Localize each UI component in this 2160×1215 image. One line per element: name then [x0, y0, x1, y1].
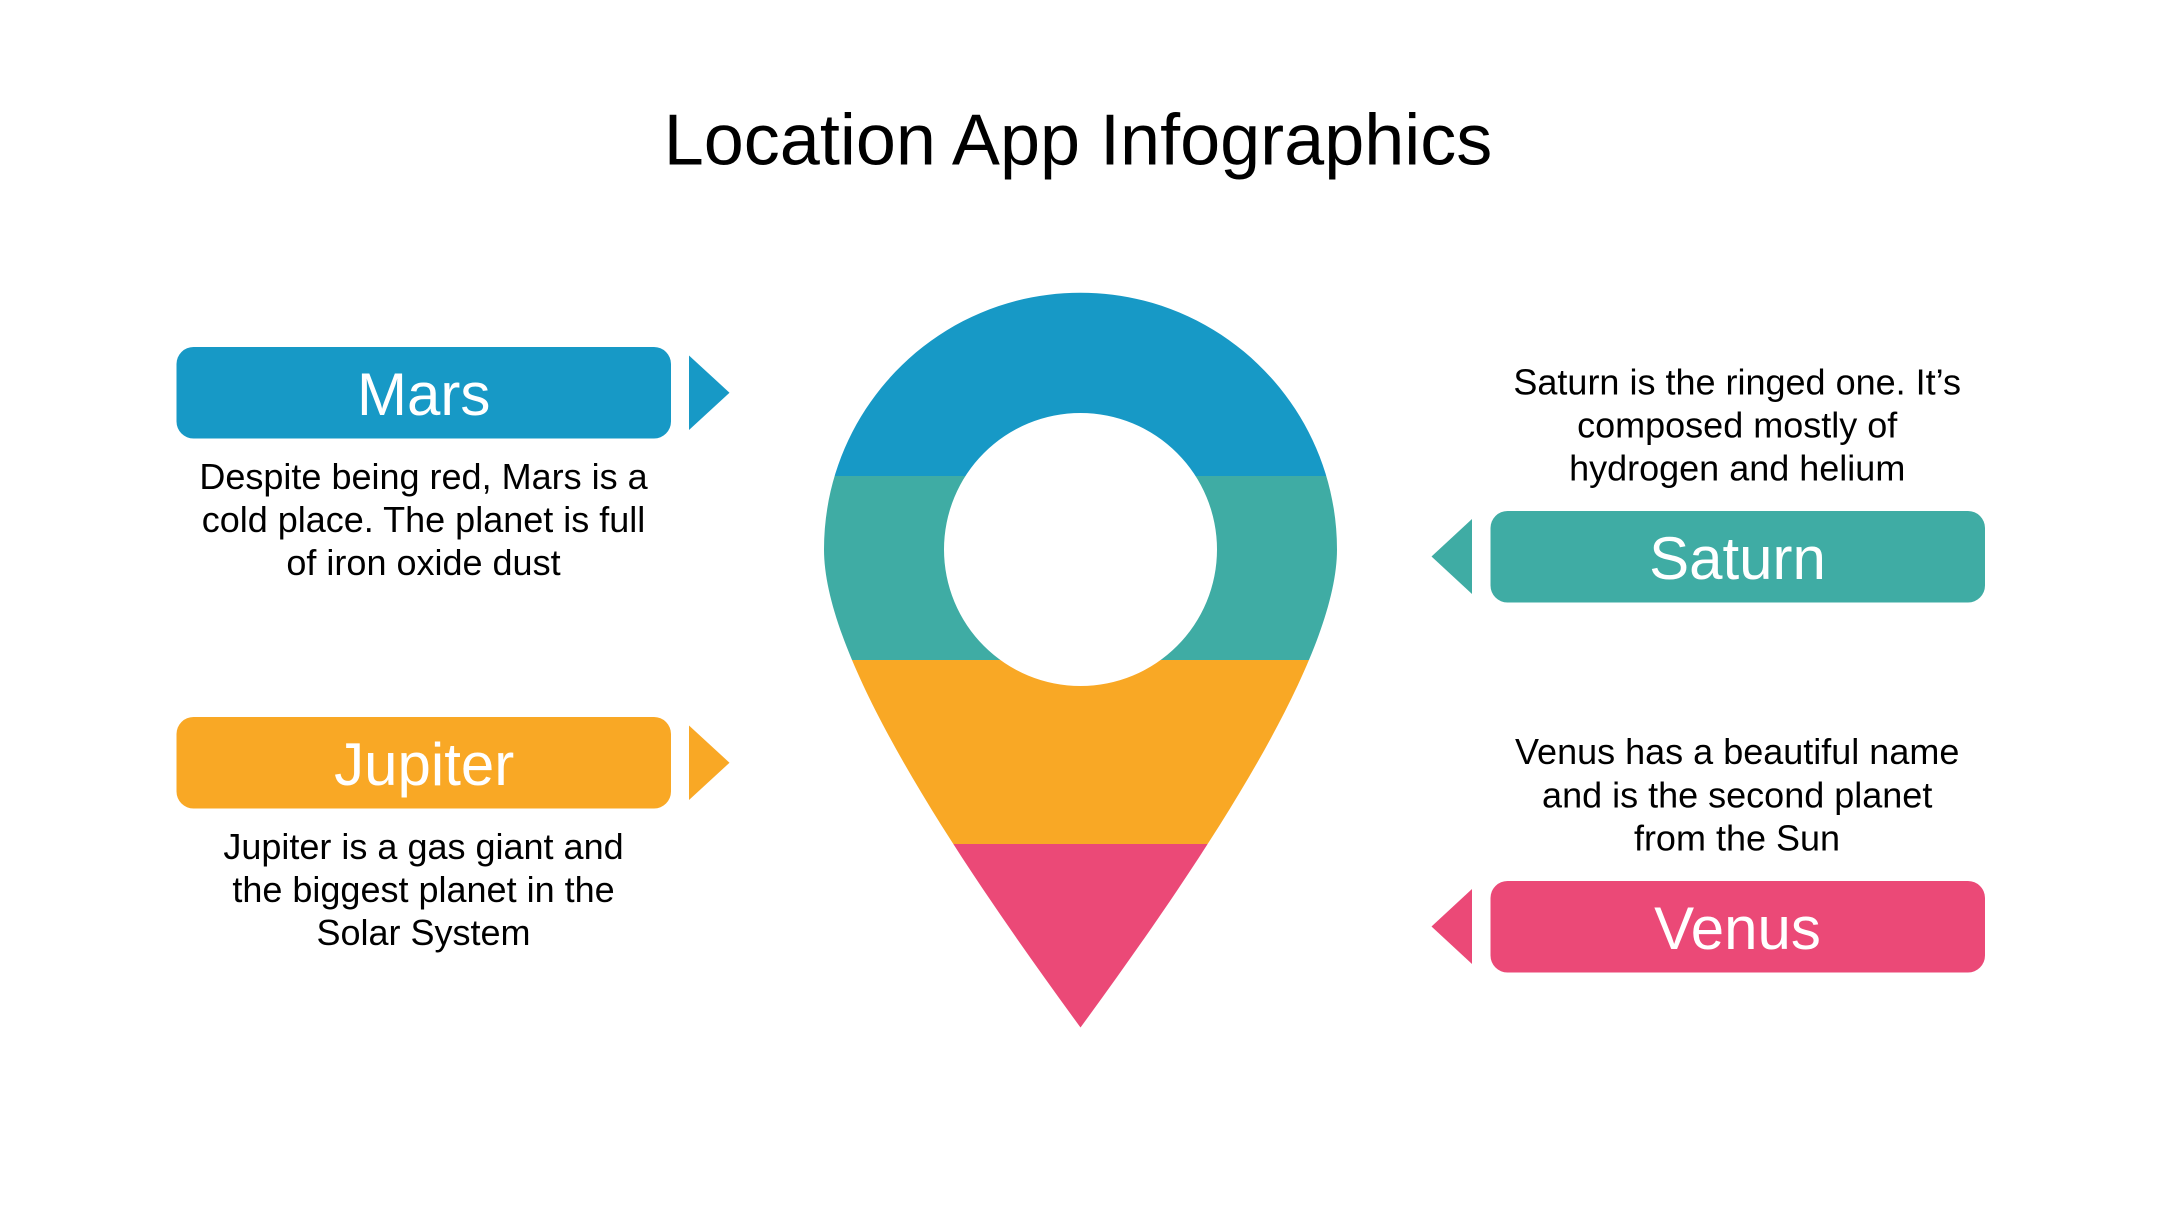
- Jupiter description: Jupiter is a gas giant and: [223, 826, 624, 867]
- Jupiter label bar: Jupiter: [334, 731, 514, 798]
- panel: Venus: [1432, 731, 1985, 972]
- arrow: Venus: [1432, 889, 1472, 964]
- Venus description: and is the second planet: [1542, 774, 1932, 815]
- Saturn description: hydrogen and helium: [1569, 448, 1905, 489]
- Venus description: from the Sun: [1634, 818, 1840, 859]
- Venus label bar: Venus: [1654, 895, 1821, 962]
- location pin chart: [824, 292, 1337, 1028]
- arrow: Mars: [689, 356, 730, 430]
- Jupiter label bar: [176, 717, 671, 808]
- Jupiter description: Solar System: [316, 912, 531, 953]
- panel: Saturn: [1432, 361, 1985, 602]
- Mars description: Despite being red, Mars is a: [199, 456, 649, 497]
- pin band: Venus pink: [953, 844, 1208, 1028]
- Venus label bar: [1490, 881, 1985, 972]
- Venus description: Venus has a beautiful name: [1515, 731, 1959, 772]
- panel: Jupiter: [176, 717, 730, 953]
- title: Location App Infographics: [664, 100, 1492, 180]
- Saturn description: Saturn is the ringed one. It’s: [1513, 361, 1961, 402]
- Mars description: cold place. The planet is full: [202, 499, 645, 540]
- Saturn description: composed mostly of: [1577, 404, 1898, 445]
- Mars description: of iron oxide dust: [286, 542, 561, 583]
- Mars label bar: Mars: [357, 361, 490, 428]
- Saturn label bar: [1490, 511, 1985, 602]
- pin band: Jupiter orange: [852, 660, 1309, 844]
- arrow: Saturn: [1432, 519, 1472, 594]
- panel: Mars: [176, 347, 730, 583]
- Saturn label bar: Saturn: [1649, 525, 1826, 592]
- Jupiter description: the biggest planet in the: [232, 869, 615, 910]
- Mars label bar: [176, 347, 671, 438]
- arrow: Jupiter: [689, 726, 730, 800]
- pin band: Mars blue: [834, 292, 1326, 476]
- pin band: Saturn teal: [800, 476, 1360, 660]
